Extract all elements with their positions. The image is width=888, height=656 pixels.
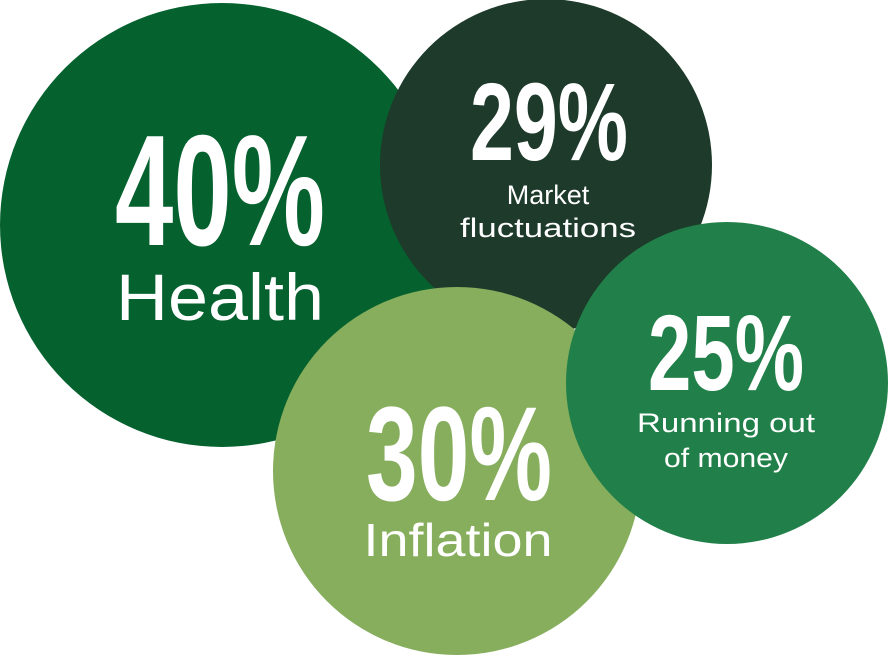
- label: health: Health: [116, 260, 324, 334]
- label: running out: Running out: [637, 408, 816, 438]
- label: fluctuations: fluctuations: [460, 213, 636, 243]
- label: market fluctuations: Market: [507, 180, 590, 210]
- stat: 40%: 40%: [115, 103, 325, 279]
- panel: running out of money: [566, 222, 888, 544]
- panel: market fluctuations: [380, 0, 712, 331]
- stat: 30%: 30%: [366, 380, 552, 529]
- label: of money: of money: [664, 443, 789, 473]
- panel: inflation: [273, 287, 641, 655]
- stat: 29%: 29%: [470, 61, 628, 184]
- label: inflation: Inflation: [364, 514, 552, 566]
- stat: 25%: 25%: [648, 292, 804, 413]
